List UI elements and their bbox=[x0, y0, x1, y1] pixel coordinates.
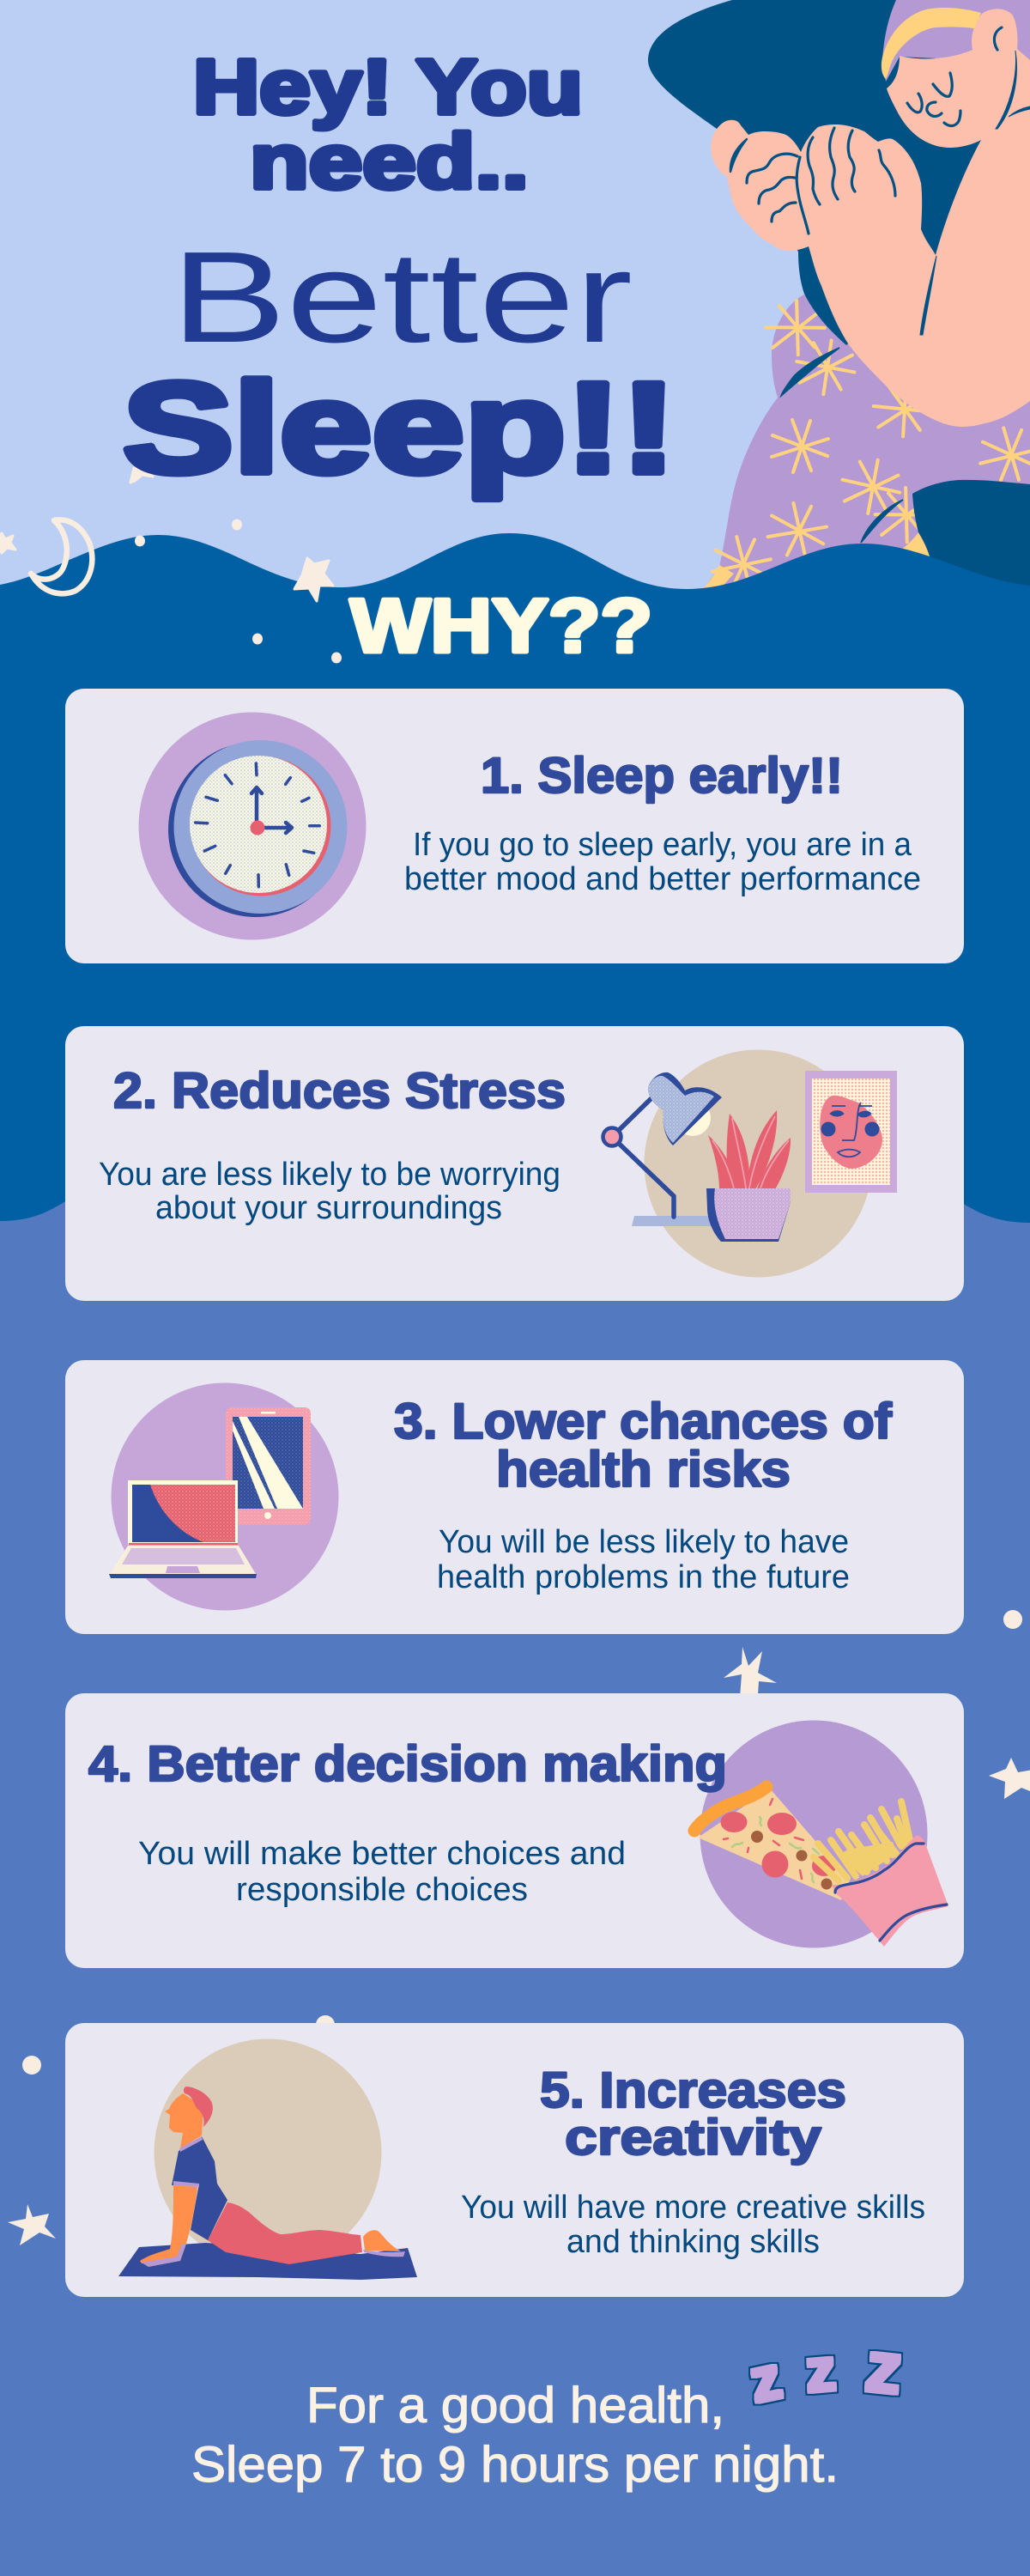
heading: 1. Sleep early!! bbox=[481, 748, 843, 804]
foot bbox=[363, 2230, 401, 2251]
head bbox=[165, 2093, 203, 2148]
mat bbox=[118, 2243, 417, 2280]
heading bbox=[394, 1394, 893, 1498]
text block bbox=[99, 1157, 560, 1226]
icon: star behind title bbox=[130, 468, 153, 483]
icon: laptop and tablet bbox=[109, 1382, 338, 1611]
heading: 5. Increases bbox=[540, 2063, 846, 2118]
icon: star right edge bbox=[989, 1758, 1030, 1799]
dress bbox=[701, 295, 1030, 592]
text block: better mood and better performance bbox=[404, 861, 921, 897]
text block: You will make better choices and bbox=[138, 1836, 626, 1872]
footer message: For a good health, bbox=[306, 2378, 724, 2433]
icon: zzz: Z bbox=[805, 2349, 837, 2402]
heading: need..: need.. bbox=[250, 119, 529, 205]
head and neck bbox=[887, 9, 1030, 172]
plant bbox=[706, 1110, 791, 1242]
icon: star between cards 3 and 4 bbox=[724, 1647, 777, 1709]
text block: about your surroundings bbox=[155, 1190, 502, 1226]
headband bbox=[882, 8, 981, 79]
wave: dark blue ground bbox=[0, 533, 1030, 1223]
arm and hands bbox=[711, 103, 1030, 427]
icon: star lower left bbox=[8, 2204, 56, 2245]
trousers bbox=[208, 2202, 362, 2264]
shirt bbox=[172, 2136, 227, 2240]
text block: You will have more creative skills bbox=[461, 2190, 925, 2226]
tablet bbox=[226, 1407, 311, 1525]
lamp bbox=[603, 1072, 722, 1226]
decorative moon and stars bbox=[0, 468, 1030, 2245]
text block: You are less likely to be worrying bbox=[99, 1157, 560, 1193]
title block bbox=[123, 45, 676, 500]
heading: creativity bbox=[565, 2110, 821, 2166]
text block bbox=[404, 827, 921, 897]
dark arm bbox=[912, 480, 1030, 592]
icon: clock bbox=[139, 713, 366, 939]
heading: Sleep!!: Sleep!! bbox=[123, 355, 676, 500]
background lower section bbox=[0, 1116, 1030, 2576]
icon: zzz bbox=[748, 2342, 902, 2412]
text block: You will be less likely to have bbox=[439, 1524, 849, 1560]
icon: person in yoga pose bbox=[118, 2038, 417, 2280]
collar bbox=[179, 2136, 203, 2152]
text block: health problems in the future bbox=[437, 1559, 850, 1595]
panel: 4 better decision making bbox=[65, 1693, 964, 1968]
hand and face lines bbox=[730, 27, 1030, 335]
dots bbox=[22, 519, 1022, 2075]
hair bbox=[184, 2087, 213, 2127]
laptop bbox=[109, 1480, 257, 1578]
text block bbox=[138, 1836, 626, 1908]
panel: 2 reduces stress bbox=[65, 1026, 964, 1301]
headscarf bbox=[882, 0, 1030, 82]
icon: star on wave bbox=[294, 558, 333, 601]
heading: 4. Better decision making bbox=[88, 1736, 727, 1792]
footer message: Sleep 7 to 9 hours per night. bbox=[191, 2437, 839, 2493]
icon: small star left bbox=[0, 533, 15, 553]
hair bbox=[648, 0, 987, 345]
icon: pizza and fries bbox=[694, 1721, 948, 1947]
fries box bbox=[833, 1836, 948, 1947]
panel: 1 sleep early bbox=[65, 689, 964, 963]
heading: health risks bbox=[496, 1442, 791, 1498]
pizza slice bbox=[694, 1787, 850, 1900]
text block: responsible choices bbox=[236, 1872, 528, 1908]
heading: WHY??: WHY?? bbox=[350, 583, 652, 668]
text block bbox=[461, 2190, 925, 2260]
panel: 3 health risks bbox=[65, 1360, 964, 1634]
icon: zzz: Z bbox=[864, 2342, 902, 2405]
icon: crescent moon bbox=[31, 519, 92, 593]
arm bbox=[140, 2185, 197, 2263]
dress star pattern bbox=[697, 294, 1030, 592]
fries bbox=[814, 1801, 910, 1880]
heading: Better: Better bbox=[171, 224, 633, 369]
icon: desk with lamp, plant and picture bbox=[603, 1049, 897, 1278]
heading bbox=[540, 2063, 846, 2166]
illustration: sleeping woman bbox=[648, 0, 1030, 592]
heading: 3. Lower chances of bbox=[394, 1394, 893, 1449]
text block: and thinking skills bbox=[566, 2224, 820, 2260]
icon: zzz: Z bbox=[748, 2357, 785, 2412]
heading: 2. Reduces Stress bbox=[113, 1063, 566, 1119]
picture frame bbox=[805, 1071, 897, 1193]
background sky bbox=[0, 0, 1030, 653]
dress creases bbox=[781, 348, 903, 543]
text block bbox=[437, 1524, 850, 1595]
footer message bbox=[191, 2378, 839, 2493]
panel: 5 increases creativity bbox=[65, 2023, 964, 2297]
heading: Hey! You: Hey! You bbox=[193, 45, 583, 131]
text block: If you go to sleep early, you are in a bbox=[413, 827, 912, 863]
